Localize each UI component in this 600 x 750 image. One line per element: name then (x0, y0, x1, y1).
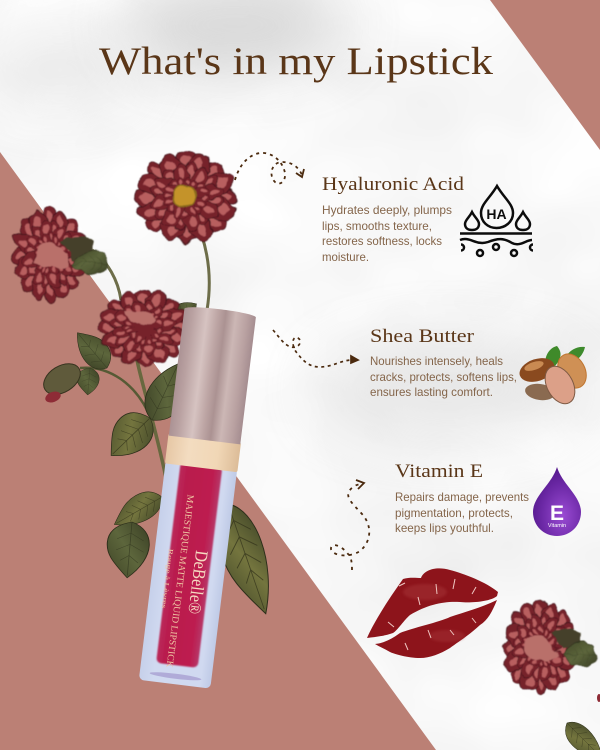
product label text: Rouge à Lèvres (160, 548, 174, 609)
product label text: DeBelle® (184, 549, 212, 615)
illustration: bottom-right corner leaf (559, 694, 600, 750)
text: hyaluronic acid description: Hydrates deeply, plumps (322, 203, 452, 217)
gold collar (165, 434, 241, 472)
text: shea butter description: Nourishes intensely, heals (370, 354, 503, 368)
panel: bottom-left rose triangle (0, 152, 436, 750)
illustration: flower stems and leaves (38, 236, 284, 621)
text: hyaluronic acid description: moisture. (322, 250, 369, 264)
icon: vitamin E drop: E (550, 502, 564, 525)
text: shea butter description (370, 354, 517, 399)
tube glass body (139, 459, 237, 689)
illustration: top dahlia flower (120, 137, 252, 257)
panel: top-right rose triangle (490, 0, 600, 150)
illustration: red lips print (367, 568, 498, 658)
text: hyaluronic acid description: restores softness, locks (322, 234, 442, 248)
illustration: left flower (1, 194, 108, 316)
text: vitamin E description: pigmentation, protects, (395, 506, 513, 520)
icon: vitamin E drop: Vitamin (548, 523, 566, 529)
icon: hyaluronic acid droplets: HA (486, 206, 507, 222)
text: shea butter description: cracks, protects, softens lips, (370, 370, 517, 384)
illustration: bottom-right flower (491, 586, 598, 708)
lipstick colour (156, 461, 222, 668)
heading: Vitamin E: Vitamin E (395, 461, 483, 482)
text: vitamin E description: Repairs damage, prevents (395, 490, 529, 504)
arrow: to vitamin E (331, 480, 369, 570)
text: hyaluronic acid description (322, 203, 452, 264)
product label text (153, 493, 219, 671)
product: lipstick tube (138, 305, 257, 689)
text: hyaluronic acid description: lips, smooths texture, (322, 219, 432, 233)
icon: vitamin E drop (533, 467, 581, 536)
title: What's in my Lipstick (99, 40, 494, 83)
rose-gold cap (169, 305, 256, 444)
heading: Shea Butter: Shea Butter (370, 326, 475, 347)
heading: Hyaluronic Acid: Hyaluronic Acid (322, 174, 465, 195)
text: shea butter description: ensures lasting comfort. (370, 385, 493, 399)
arrow: to shea butter (273, 330, 358, 367)
icon: shea nuts (516, 346, 592, 409)
text: vitamin E description (395, 490, 529, 535)
icon: hyaluronic acid droplets (460, 186, 533, 256)
illustration: middle flower (84, 279, 204, 377)
arrow: to hyaluronic acid (235, 153, 304, 184)
product label text: MAJESTIQUE MATTE LIQUID LIPSTICK (164, 494, 195, 668)
text: vitamin E description: keeps lips youthful. (395, 521, 494, 535)
